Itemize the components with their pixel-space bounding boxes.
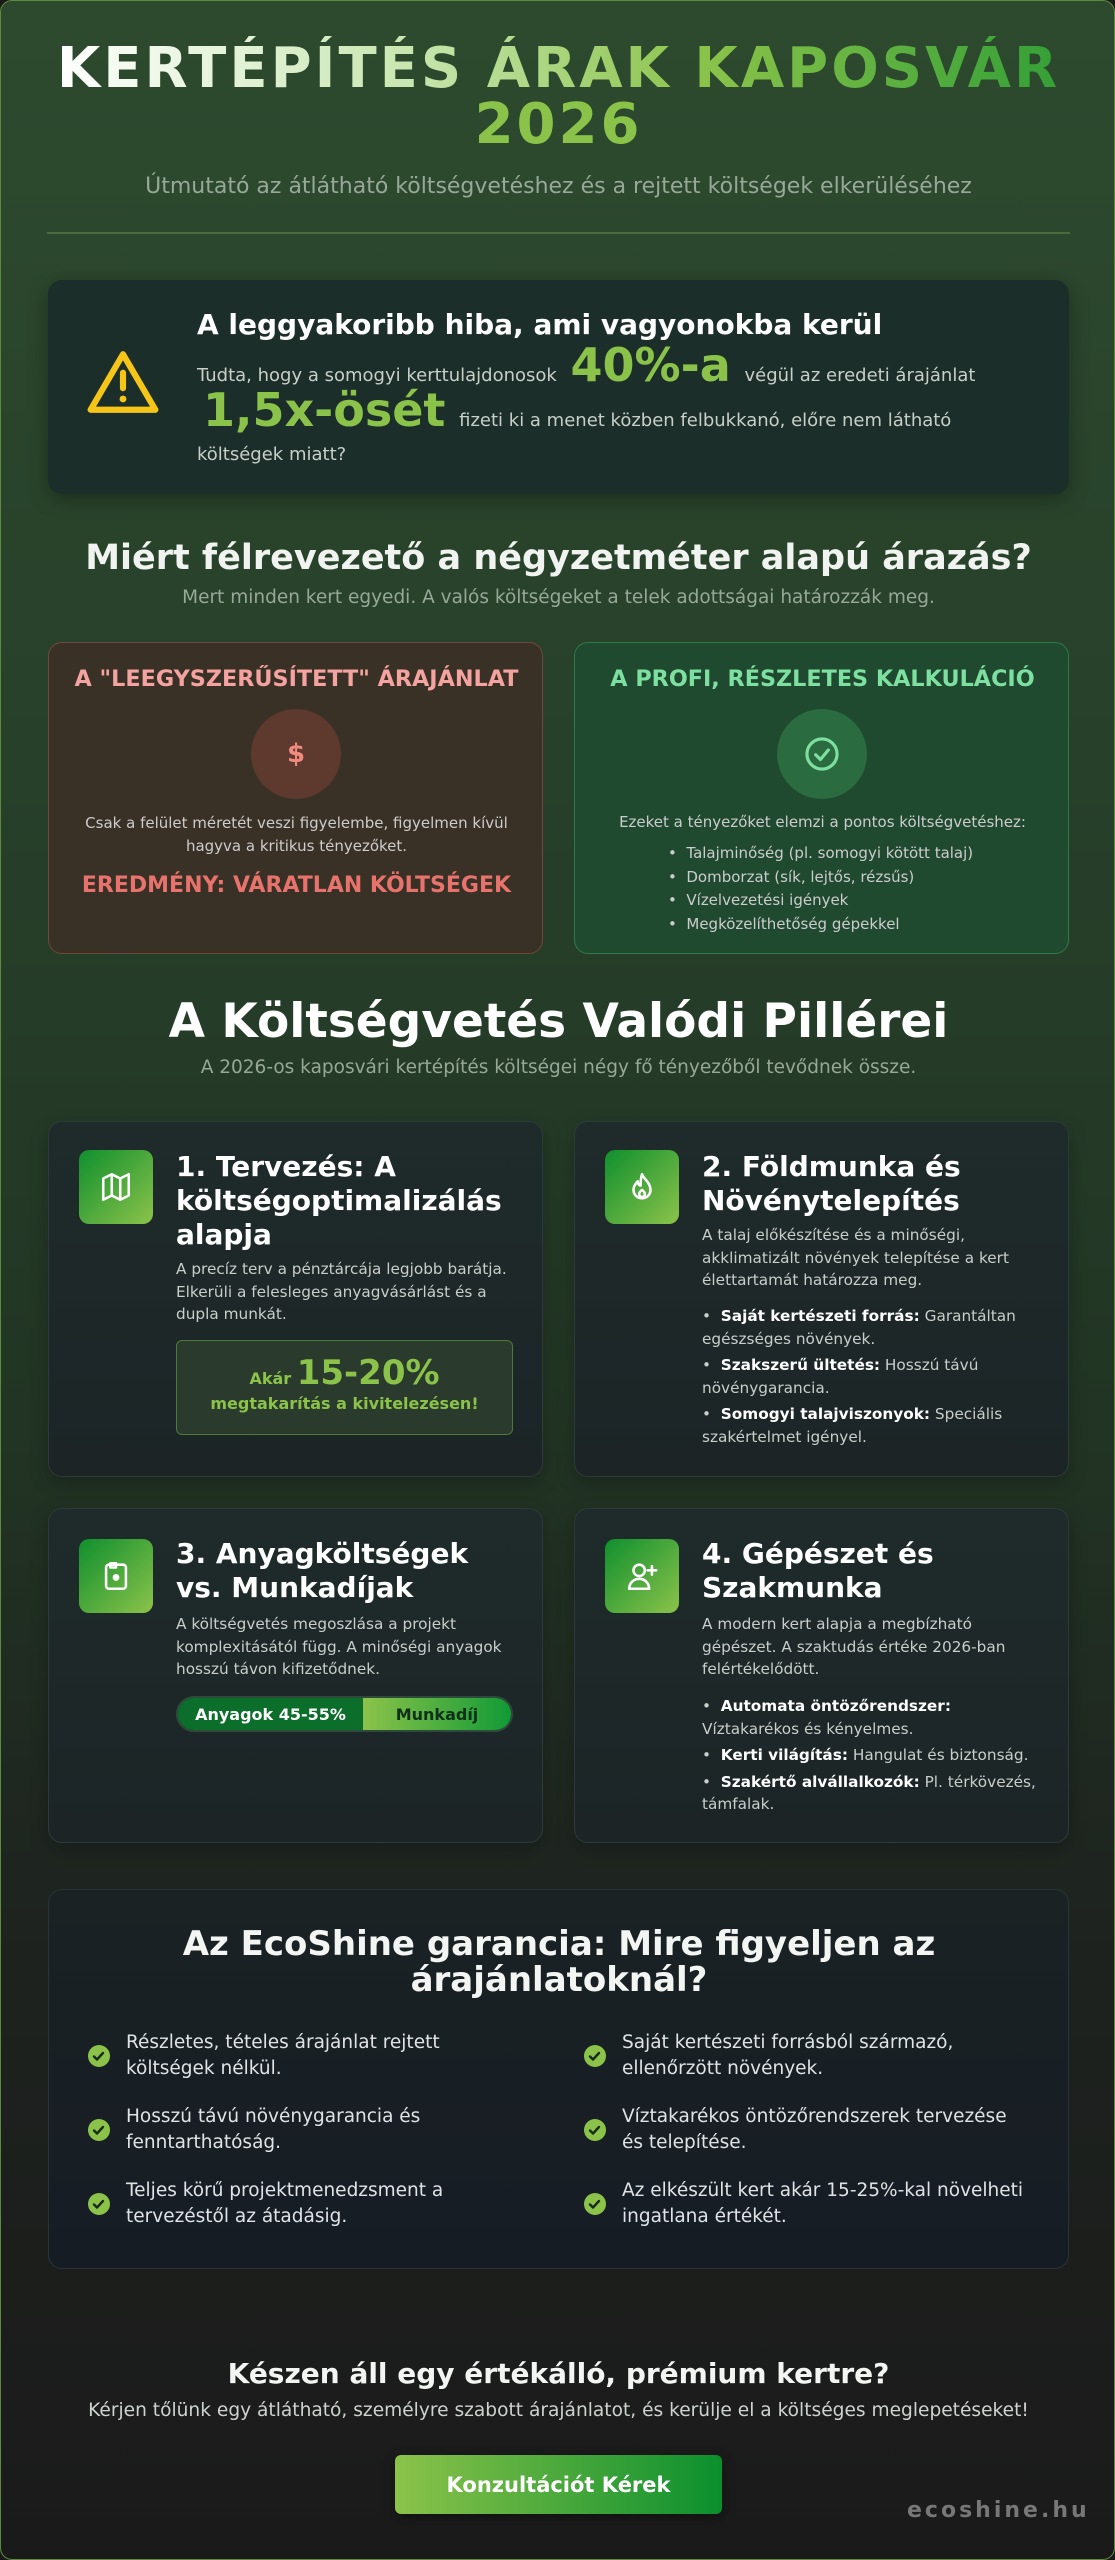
icon: user plus bbox=[605, 1539, 679, 1613]
card: earthwork bbox=[574, 1121, 1069, 1477]
factor list bbox=[668, 844, 973, 932]
bullet list: • Automata öntözőrendszer: Víztakarékos és kényelmes. bbox=[702, 1697, 951, 1738]
icon: dollar bbox=[251, 709, 341, 799]
bullet list: • Szakszerű ültetés: Hosszú távú növénygarancia. bbox=[702, 1356, 978, 1396]
guarantee list: Teljes körű projektmenedzsment a tervezéstől az átadásig. bbox=[126, 2180, 443, 2227]
brand watermark: ecoshine.hu bbox=[907, 2498, 1090, 2523]
CTA text: Kérjen tőlünk egy átlátható, személyre szabott árajánlatot, és kerülje el a költséges meglepetéseket! bbox=[88, 2400, 1029, 2421]
guarantee list: Víztakarékos öntözőrendszerek tervezése és telepítése. bbox=[622, 2106, 1007, 2153]
bar: cost split: Anyagok 45-55% bbox=[195, 1704, 346, 1724]
icon: dollar: $ bbox=[287, 739, 305, 769]
callout: savings bbox=[176, 1340, 513, 1435]
card text: A modern kert alapja a megbízható gépészet. A szaktudás értéke 2026-ban felértékelődött. bbox=[702, 1615, 1005, 1678]
panel: professional calculation bbox=[574, 642, 1069, 954]
title: KERTÉPÍTÉS ÁRAK KAPOSVÁR bbox=[57, 36, 1060, 101]
icon: warning bbox=[88, 351, 158, 413]
callout: savings: Akár 15-20% bbox=[249, 1353, 440, 1393]
panel text: Ezeket a tényezőket elemzi a pontos költségvetéshez: bbox=[619, 813, 1026, 831]
CTA heading: Készen áll egy értékálló, prémium kertre? bbox=[228, 2357, 889, 2390]
bullet list bbox=[702, 1307, 1016, 1446]
title bbox=[57, 36, 1060, 157]
factor list: • Talajminőség (pl. somogyi kötött talaj) bbox=[668, 844, 973, 862]
icon: clipboard bbox=[79, 1539, 153, 1613]
guarantee list: Hosszú távú növénygarancia és fenntarthatóság. bbox=[126, 2106, 420, 2153]
bullet list bbox=[702, 1697, 1036, 1813]
factor list: • Vízelvezetési igények bbox=[668, 891, 848, 909]
CTA button: Konzultációt Kérek bbox=[446, 2472, 670, 2496]
title: 2026 bbox=[475, 92, 642, 157]
guarantee list: Az elkészült kert akár 15-25%-kal növelheti ingatlana értékét. bbox=[622, 2180, 1023, 2227]
section heading: pillars: A Költségvetés Valódi Pillérei bbox=[169, 994, 948, 1049]
bullet list: • Szakértő alvállalkozók: Pl. térkövezés, támfalak. bbox=[702, 1772, 1036, 1813]
bullet list: • Saját kertészeti forrás: Garantáltan egészséges növények. bbox=[702, 1307, 1016, 1348]
bar: cost split bbox=[176, 1696, 513, 1732]
panel: alert box bbox=[48, 280, 1069, 494]
alert text: Tudta, hogy a somogyi kerttulajdonosok 40%-a végül az eredeti árajánlat 1,5x-ösét fizeti ki a menet közben felbukkanó, előre nem látható költségek miatt? bbox=[197, 338, 975, 465]
card: materials vs labour bbox=[48, 1508, 543, 1843]
card text: A költségvetés megoszlása a projekt komplexitásától függ. A minőségi anyagok hosszú távon kifizetődnek. bbox=[176, 1615, 502, 1678]
result: EREDMÉNY: VÁRATLAN KÖLTSÉGEK bbox=[82, 873, 511, 898]
guarantee list: Saját kertészeti forrásból származó, ellenőrzött növények. bbox=[622, 2032, 953, 2079]
card title: 3. Anyagköltségek vs. Munkadíjak bbox=[176, 1537, 468, 1604]
factor list: • Domborzat (sík, lejtős, rézsűs) bbox=[668, 868, 914, 886]
card text: A talaj előkészítése és a minőségi, akklimatizált növények telepítése a kert élettartamát határozza meg. bbox=[702, 1226, 1009, 1289]
bullet list: • Somogyi talajviszonyok: Speciális szakértelmet igényel. bbox=[702, 1405, 1002, 1446]
bar: cost split: Munkadíj bbox=[396, 1704, 478, 1724]
guarantee heading: Az EcoShine garancia: Mire figyeljen az árajánlatoknál? bbox=[183, 1924, 935, 2000]
alert heading: A leggyakoribb hiba, ami vagyonokba kerül bbox=[197, 308, 882, 341]
section heading: misleading pricing: Miért félrevezető a négyzetméter alapú árazás? bbox=[85, 538, 1032, 578]
callout: savings: megtakarítás a kivitelezésen! bbox=[210, 1394, 479, 1413]
panel title: A PROFI, RÉSZLETES KALKULÁCIÓ bbox=[610, 666, 1035, 692]
icon: check circle bbox=[777, 709, 867, 799]
card title: 2. Földmunka és Növénytelepítés bbox=[702, 1150, 961, 1217]
icon: flame bbox=[605, 1150, 679, 1224]
card: planning bbox=[48, 1121, 543, 1477]
subtitle: Útmutató az átlátható költségvetéshez és a rejtett költségek elkerüléséhez bbox=[145, 174, 972, 199]
factor list: • Megközelíthetőség gépekkel bbox=[668, 914, 900, 932]
panel text: Csak a felület méretét veszi figyelembe, figyelmen kívül hagyva a kritikus tényezőket. bbox=[85, 814, 508, 855]
bullet list: • Kerti világítás: Hangulat és biztonság. bbox=[702, 1746, 1028, 1764]
panel title: A "LEEGYSZERŰSÍTETT" ÁRAJÁNLAT bbox=[75, 666, 518, 692]
icon: map bbox=[79, 1150, 153, 1224]
card title: 4. Gépészet és Szakmunka bbox=[702, 1537, 934, 1604]
section subheading: A 2026-os kaposvári kertépítés költségei négy fő tényezőből tevődnek össze. bbox=[201, 1057, 916, 1078]
card: machinery bbox=[574, 1508, 1069, 1843]
panel: guarantee bbox=[48, 1889, 1069, 2269]
card text: A precíz terv a pénztárcája legjobb barátja. Elkerüli a felesleges anyagvásárlást és a dupla munkát. bbox=[176, 1260, 507, 1323]
panel: simplified offer bbox=[48, 642, 543, 954]
guarantee list bbox=[88, 2032, 1023, 2227]
card title: 1. Tervezés: A költségoptimalizálás alapja bbox=[176, 1150, 502, 1251]
section subheading: Mert minden kert egyedi. A valós költségeket a telek adottságai határozzák meg. bbox=[182, 587, 935, 608]
guarantee list: Részletes, tételes árajánlat rejtett költségek nélkül. bbox=[126, 2032, 440, 2079]
CTA button bbox=[395, 2455, 722, 2514]
